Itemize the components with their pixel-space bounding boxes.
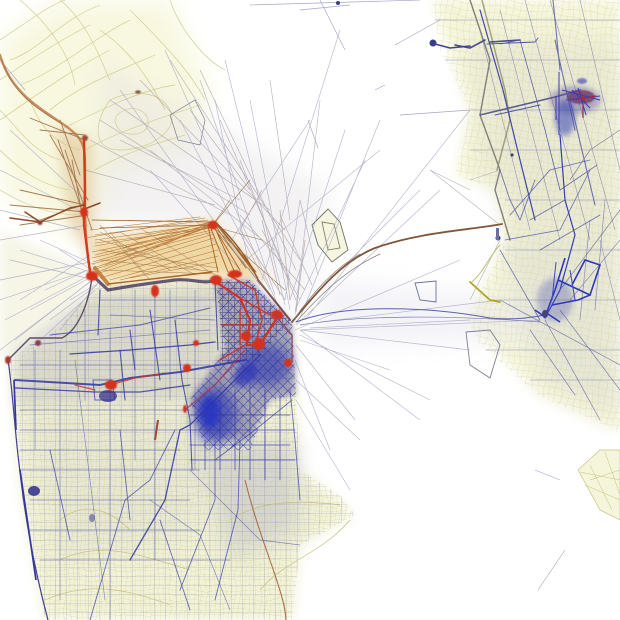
East Bay traces: freeways and avenues	[435, 0, 620, 420]
blue street traces: San Francisco	[15, 282, 300, 620]
Golden Gate Bridge to Fort Point bundle	[0, 55, 100, 272]
brown southern rail trace	[155, 420, 286, 620]
Oakland hotspot	[535, 258, 600, 322]
far right shoreline fragment	[578, 450, 620, 520]
marina to north beach ferry fan	[85, 217, 218, 280]
streets: East Bay	[432, 0, 620, 430]
northern waterfront: Marina to Fisherman's Wharf	[8, 268, 215, 360]
Ocean Beach and western edge	[8, 360, 48, 620]
streets: Treasure Island and small islands	[312, 209, 500, 378]
tourist hotspots: red photo clusters	[5, 90, 292, 413]
East Bay small knots	[336, 1, 514, 240]
dense downtown grid: tourist and local overlap	[188, 276, 300, 450]
Mission blue concentration	[193, 343, 291, 443]
Bay Bridge	[292, 224, 545, 325]
Alcatraz to Embarcadero band	[208, 180, 290, 320]
Berkeley hotspot	[549, 72, 601, 136]
streets: Marin headlands contours	[0, 0, 225, 215]
streets: southern hills contours	[45, 502, 350, 605]
local hotspots: blue knots in the southwest	[28, 390, 117, 522]
tourist routes: red traces through downtown	[75, 275, 292, 410]
streets: San Francisco	[10, 276, 355, 620]
